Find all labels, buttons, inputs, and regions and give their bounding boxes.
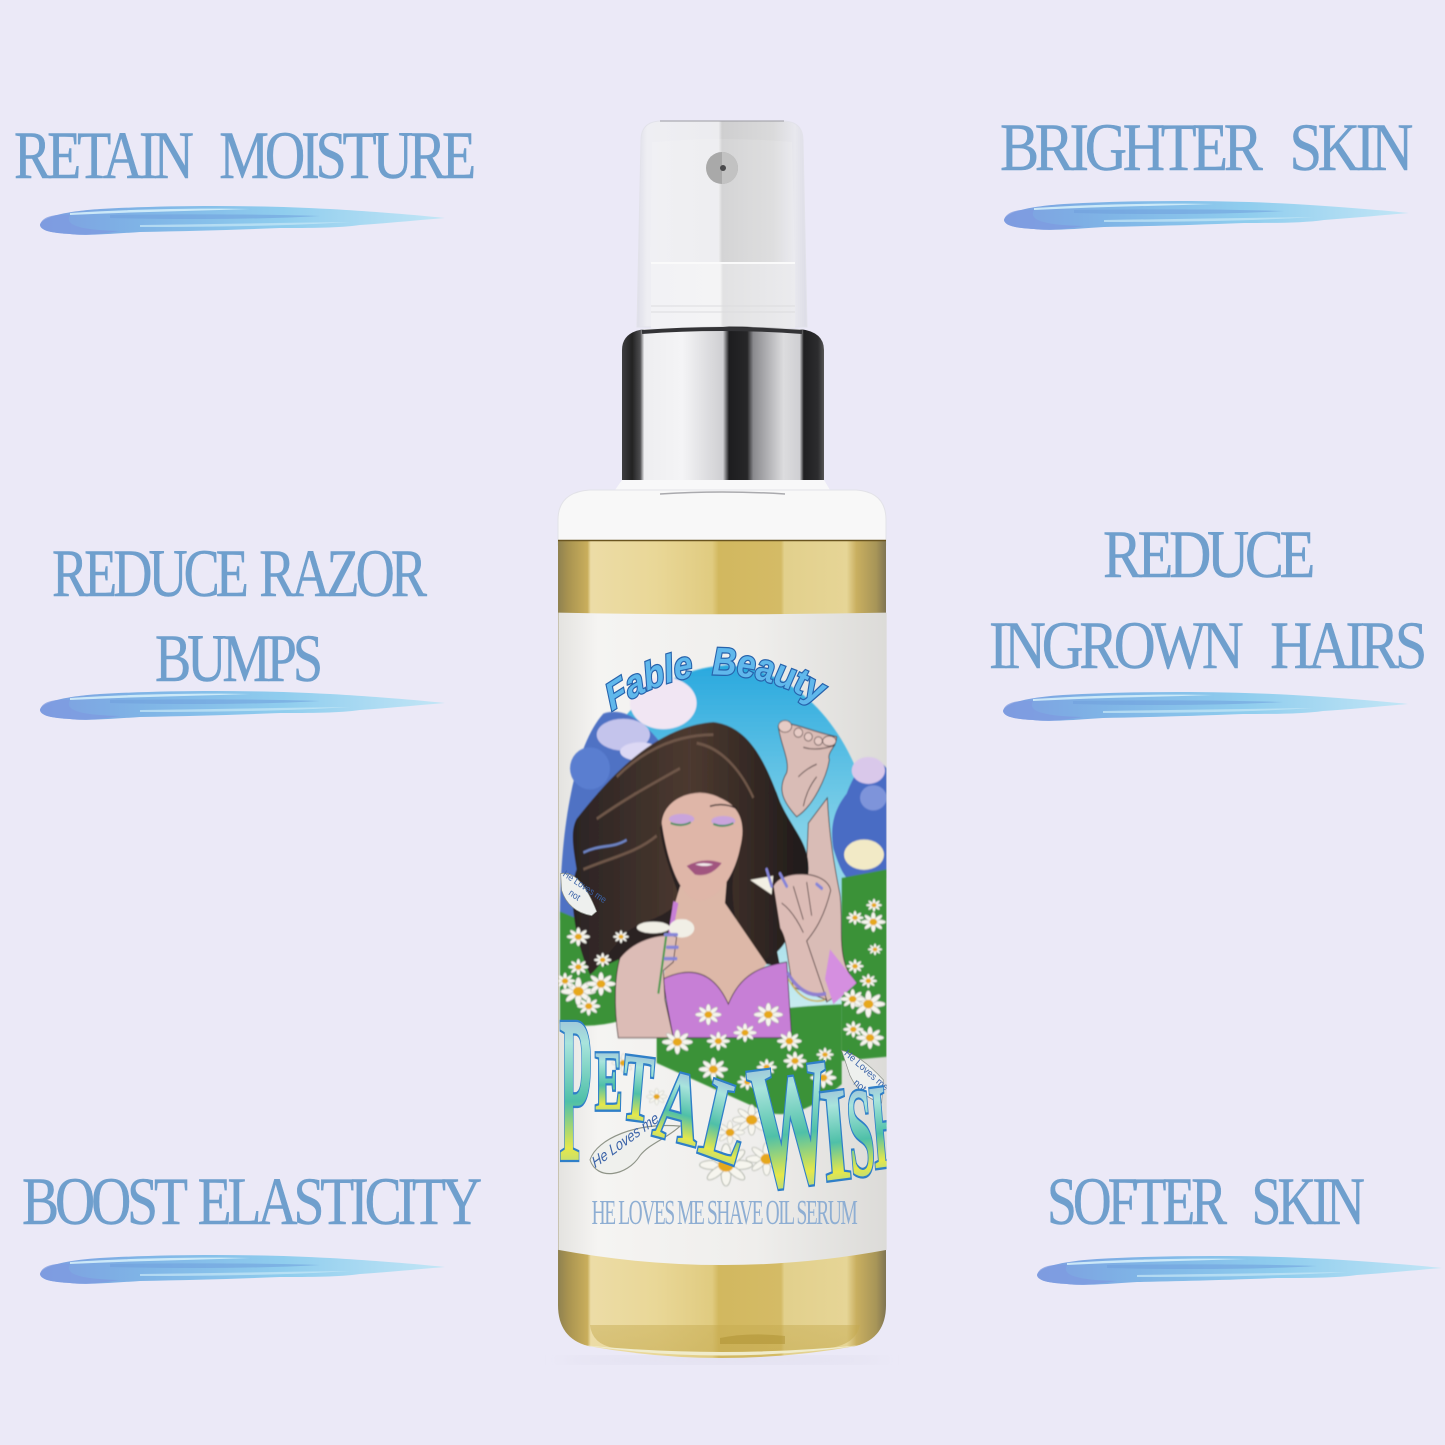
brand: Fable Beauty: Fable Beauty bbox=[605, 646, 830, 713]
held petals bbox=[637, 869, 822, 994]
product name: Petal Wish bbox=[560, 1020, 887, 1192]
left arm and hand bbox=[615, 935, 677, 1038]
ribbons bbox=[561, 868, 890, 1174]
heading: Boost Elasticity: BOOST ELASTICITY bbox=[22, 1163, 481, 1239]
spray cap bbox=[637, 121, 807, 328]
toes bbox=[778, 720, 836, 746]
heading: Reduce Ingrown Hairs bbox=[989, 516, 1424, 683]
brush stroke: Softer Skin bbox=[1037, 1256, 1442, 1285]
sky bbox=[626, 664, 854, 1009]
floor shadow bbox=[557, 1356, 887, 1364]
neck and torso bbox=[663, 882, 767, 1006]
product bottle bbox=[558, 120, 887, 1358]
product name: Petal Wish: L bbox=[691, 1053, 760, 1190]
product name: Petal Wish: T bbox=[618, 1034, 657, 1143]
heading: Softer Skin: SOFTER SKIN bbox=[1047, 1163, 1364, 1239]
ribbons: He Loves me bbox=[562, 868, 608, 906]
product name: Petal Wish: W bbox=[742, 1021, 838, 1228]
heading: Reduce Razor Bumps bbox=[52, 535, 427, 696]
straps bbox=[668, 901, 678, 937]
brush stroke: Reduce Razor Bumps bbox=[40, 691, 445, 720]
product name: Petal Wish: S bbox=[842, 1061, 879, 1205]
product name: Petal Wish: H bbox=[866, 1056, 911, 1195]
product name: Petal Wish: P bbox=[559, 973, 592, 1206]
neck bbox=[615, 480, 830, 490]
heading: Reduce Razor Bumps: BUMPS bbox=[155, 620, 320, 696]
brush stroke: Reduce Ingrown Hairs bbox=[1003, 692, 1408, 721]
clouds bbox=[560, 677, 887, 920]
brush stroke: Brighter Skin bbox=[1004, 201, 1409, 230]
product name: Petal Wish: A bbox=[648, 1047, 710, 1169]
face bbox=[662, 793, 742, 901]
product name: Petal Wish: E bbox=[595, 1033, 622, 1128]
ribbons: not bbox=[852, 1077, 868, 1096]
ribbons: He Loves me bbox=[590, 1110, 661, 1172]
illustration bbox=[558, 664, 887, 1192]
dress skirt bbox=[825, 949, 857, 1004]
bottle base bbox=[582, 1325, 862, 1356]
right hand and arm bbox=[773, 874, 831, 1000]
ribbons: not bbox=[568, 887, 582, 903]
bottle shoulder bbox=[558, 490, 886, 545]
label bbox=[558, 612, 887, 1265]
purple top bbox=[663, 962, 792, 1038]
brush stroke: Retain Moisture bbox=[40, 206, 445, 235]
bracelets bbox=[787, 973, 826, 995]
grass bbox=[560, 869, 887, 1114]
back hair bbox=[604, 824, 780, 966]
product name: Petal Wish: I bbox=[815, 1059, 855, 1211]
heading: Retain Moisture: RETAIN MOISTURE bbox=[14, 117, 474, 193]
brush stroke: Boost Elasticity bbox=[40, 1255, 445, 1284]
heading: Reduce Ingrown Hairs: REDUCE bbox=[1103, 516, 1313, 592]
leg and feet bbox=[778, 723, 857, 1002]
metal collar bbox=[622, 326, 824, 480]
oil liquid bbox=[558, 541, 886, 1358]
heading: Reduce Razor Bumps: REDUCE RAZOR bbox=[52, 535, 427, 611]
ribbons: He Loves me bbox=[842, 1047, 890, 1095]
eyes and lips bbox=[669, 805, 737, 875]
product subtitle: HE LOVES ME SHAVE OIL SERUM bbox=[592, 1193, 858, 1232]
hair bbox=[573, 722, 809, 975]
daisies bbox=[555, 899, 886, 1186]
